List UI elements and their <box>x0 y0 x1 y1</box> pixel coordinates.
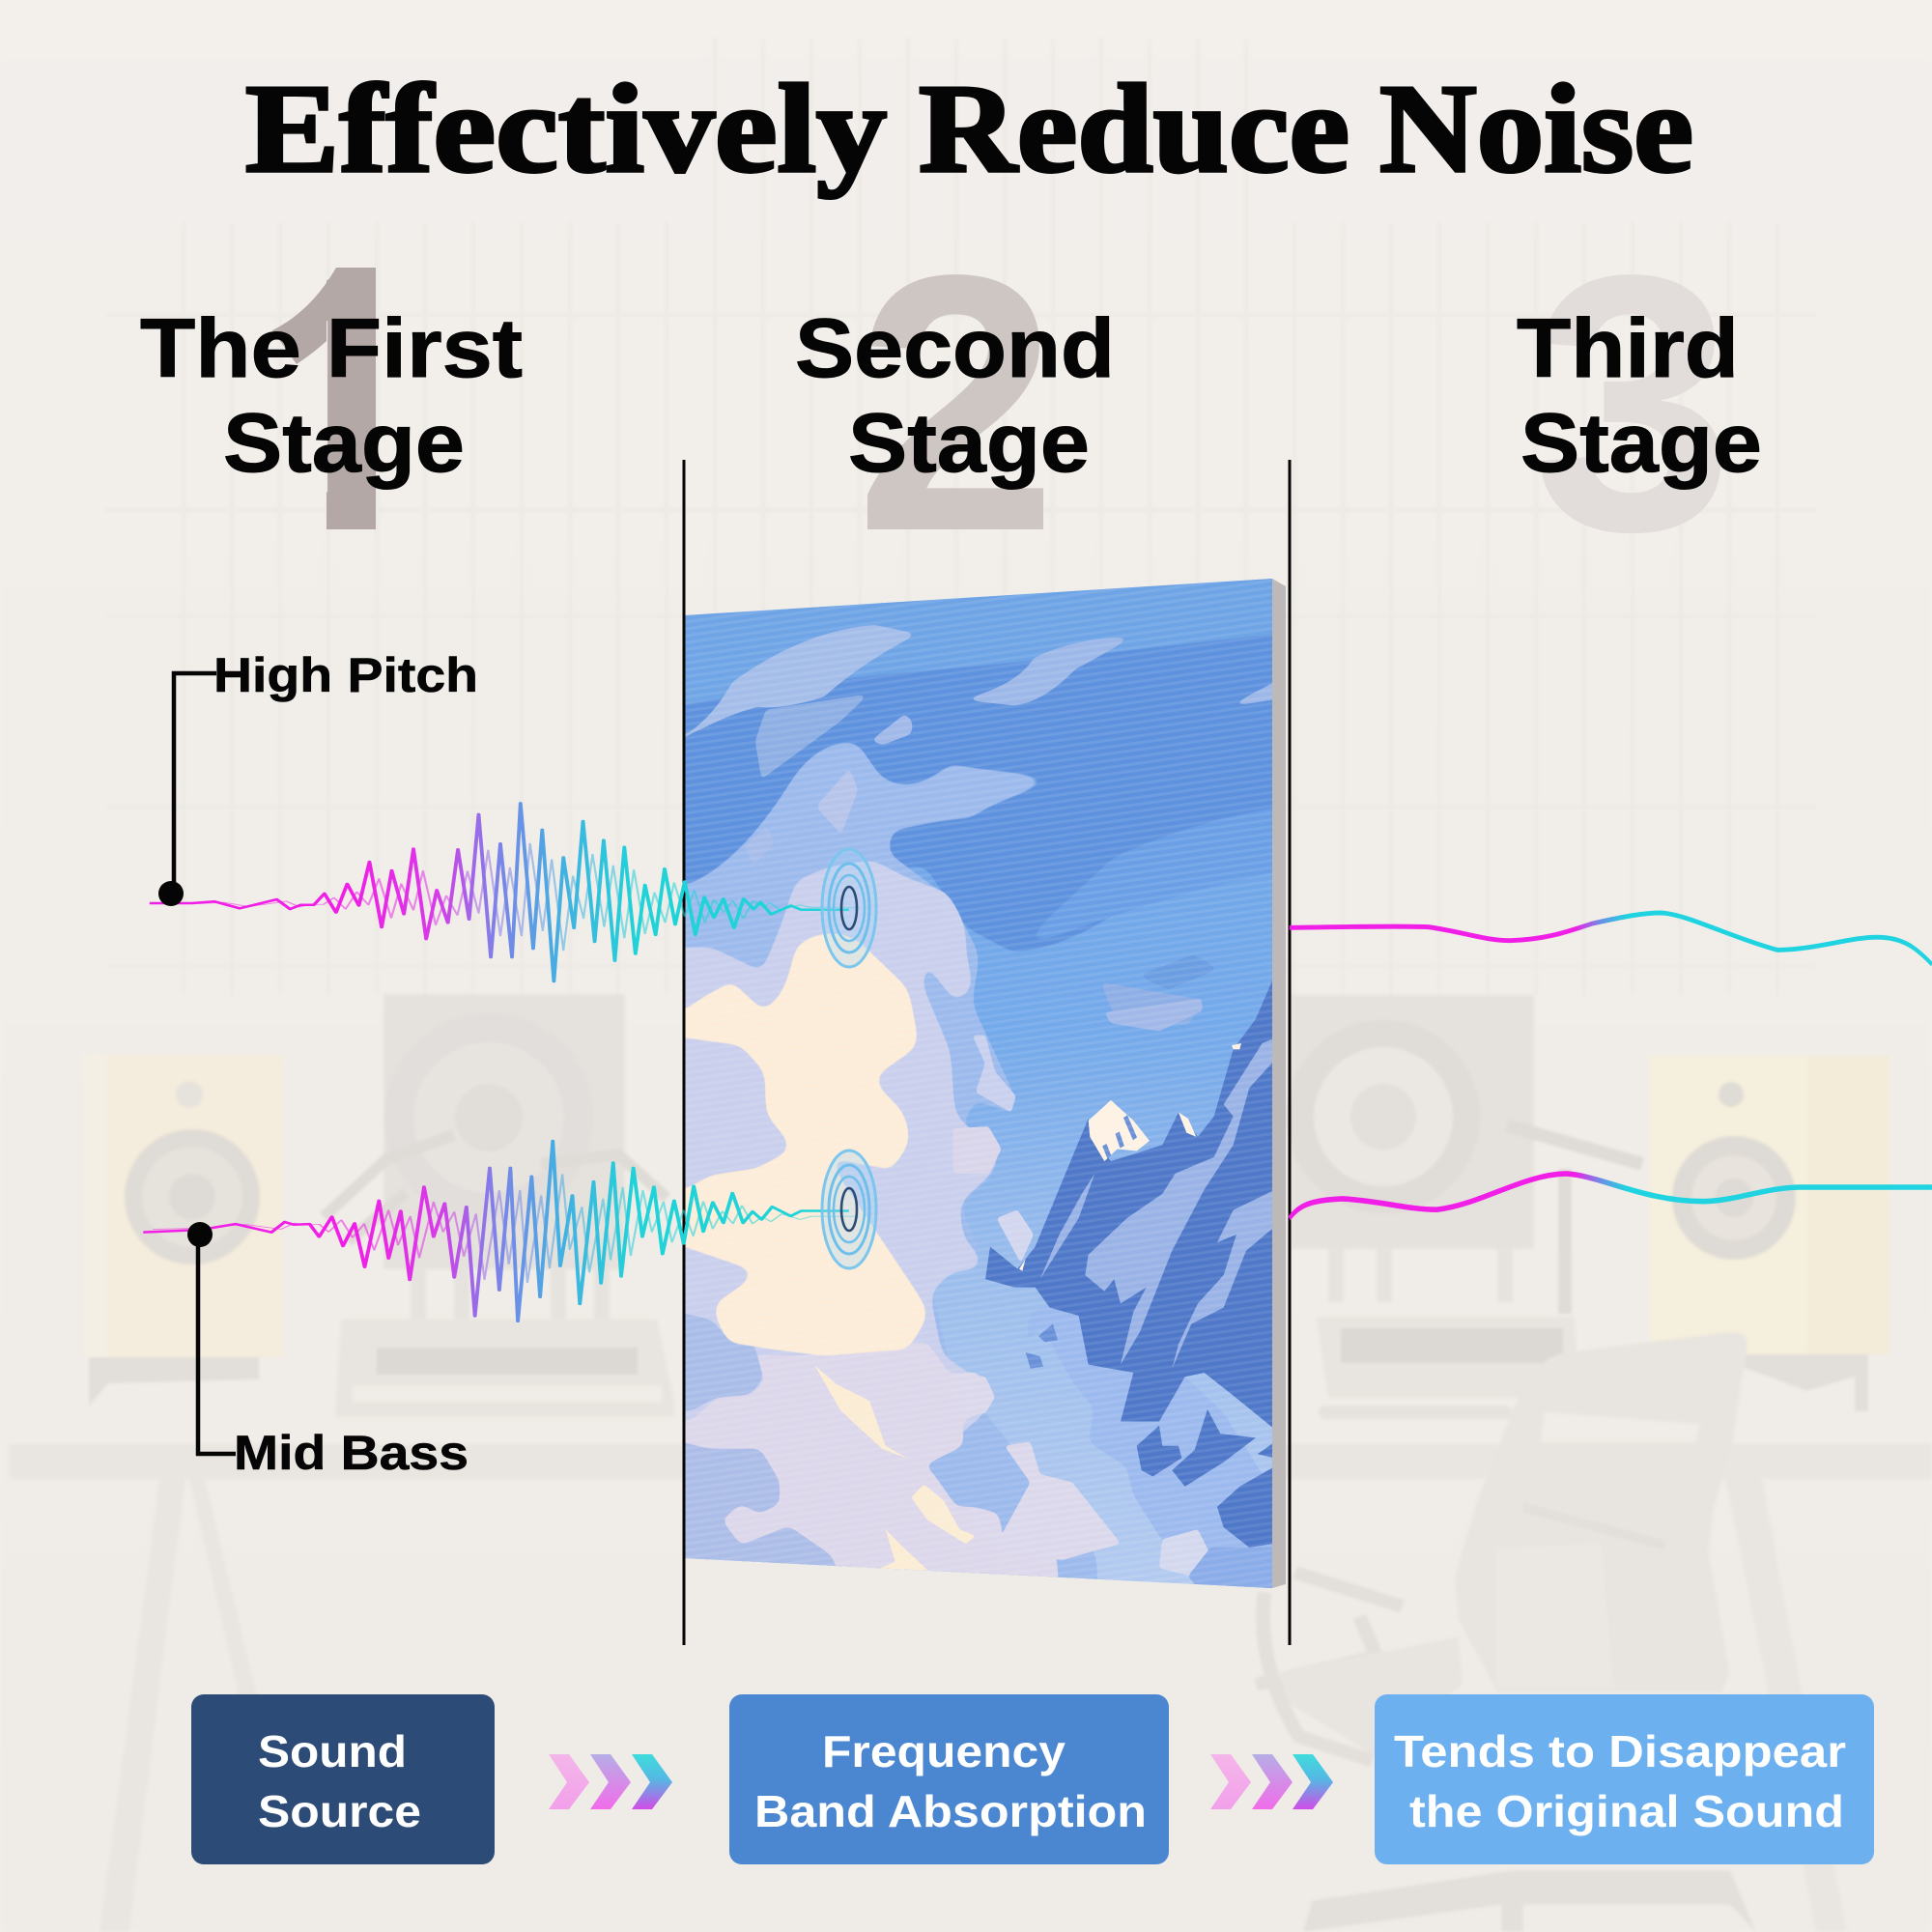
box: frequency band absorption: Frequency <box>822 1726 1065 1776</box>
box: tends to disappear: the Original Sound <box>1409 1786 1844 1836</box>
divider lines between stages <box>684 460 1290 1645</box>
arrows: stage one to two <box>549 1754 672 1809</box>
box: tends to disappear: Tends to Disappear <box>1394 1726 1846 1776</box>
callout: high pitch: High Pitch <box>213 648 478 702</box>
cream cloud <box>686 933 925 1356</box>
left yellow speaker <box>84 1055 282 1406</box>
box: frequency band absorption: Band Absorption <box>754 1786 1147 1836</box>
high pitch waveform <box>150 803 859 981</box>
acoustic panel with mountain painting <box>686 579 1272 1588</box>
mid bass waveform <box>143 1141 859 1321</box>
desk <box>9 1444 1932 1932</box>
heading: second stage: Stage <box>848 397 1090 490</box>
absorption target: mid bass <box>822 1151 876 1268</box>
heading: second stage: Second <box>795 302 1115 395</box>
residual wave: bottom <box>1290 1174 1932 1218</box>
left grey speaker <box>324 994 667 1322</box>
heading: first stage: Stage <box>223 397 465 490</box>
box: sound source: Sound <box>258 1726 407 1776</box>
callout: mid bass <box>187 1222 469 1480</box>
heading: first stage <box>140 302 523 490</box>
heading: third stage: Stage <box>1520 397 1762 490</box>
title <box>245 59 1693 199</box>
heading: second stage <box>795 302 1115 490</box>
right yellow speaker <box>1650 1056 1889 1411</box>
left keyboard <box>335 1319 674 1417</box>
title: Reduce <box>919 59 1350 199</box>
right grey speaker <box>1287 995 1642 1314</box>
box: sound source: Source <box>258 1786 421 1836</box>
big stage number 2: 2 <box>855 200 1058 608</box>
callout: high pitch <box>158 648 478 906</box>
callout: mid bass: Mid Bass <box>234 1426 469 1480</box>
box: tends to disappear <box>1375 1694 1874 1864</box>
heading: first stage: The First <box>140 302 523 395</box>
sky and upper clouds <box>686 579 1272 1584</box>
residual wave: top <box>1290 913 1932 964</box>
lower lavender clouds <box>686 1314 1059 1577</box>
lower cream streaks <box>814 1365 976 1573</box>
office chair <box>1256 1332 1756 1932</box>
heading: third stage: Third <box>1517 302 1739 395</box>
heading: third stage <box>1517 302 1762 490</box>
box: sound source <box>191 1694 495 1864</box>
acoustic panel side edge <box>1272 579 1286 1588</box>
big stage number 1 <box>272 268 376 529</box>
title: Effectively <box>245 59 887 199</box>
mountains <box>953 974 1301 1608</box>
right keyboard <box>1316 1317 1579 1419</box>
arrows: stage two to three <box>1210 1754 1333 1809</box>
foam wall panels <box>106 39 1816 995</box>
big stage number 1: 1 <box>242 200 445 608</box>
big stage number 3: 3 <box>1531 200 1734 608</box>
absorption target: high pitch <box>822 849 876 967</box>
title: Noise <box>1379 59 1693 199</box>
box: frequency band absorption <box>729 1694 1169 1864</box>
